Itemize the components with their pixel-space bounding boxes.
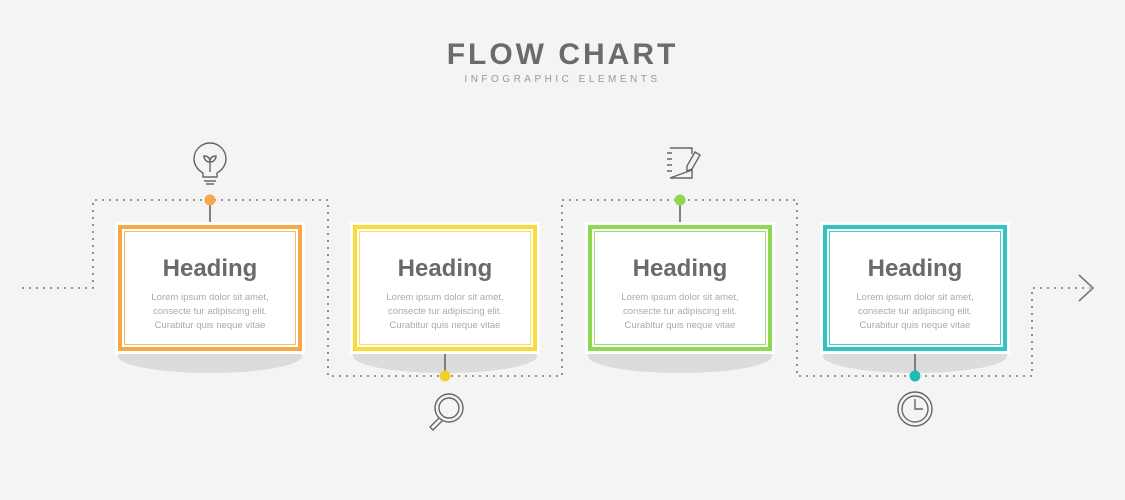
dots [204, 194, 920, 382]
icon: magnifier [430, 394, 463, 430]
panel 1: consecte tur adipiscing elit. [153, 306, 267, 317]
icon: notebook [667, 148, 700, 178]
panel 3: Curabitur quis neque vitae [625, 320, 735, 331]
title: FLOW CHART [447, 38, 678, 71]
arrow head [1079, 275, 1093, 301]
panel 2: consecte tur adipiscing elit. [388, 306, 502, 317]
panel 1: Curabitur quis neque vitae [155, 320, 265, 331]
panel 4 [820, 222, 1010, 354]
shadows [118, 339, 1007, 373]
panel 2: Curabitur quis neque vitae [390, 320, 500, 331]
panel 4: Lorem ipsum dolor sit amet, [856, 292, 974, 303]
panel 3: consecte tur adipiscing elit. [623, 306, 737, 317]
panel 4: Curabitur quis neque vitae [860, 320, 970, 331]
icon: clock [898, 392, 932, 426]
dotted path [22, 200, 1090, 376]
panel 3: Lorem ipsum dolor sit amet, [621, 292, 739, 303]
panel 4: consecte tur adipiscing elit. [858, 306, 972, 317]
connectors [210, 200, 915, 376]
panel 3: Heading [633, 255, 727, 282]
panel 2: Heading [398, 255, 492, 282]
panel 4: Heading [868, 255, 962, 282]
panel 2: Lorem ipsum dolor sit amet, [386, 292, 504, 303]
panel 2 [350, 222, 540, 354]
icon: bulb [194, 143, 226, 184]
panel 1 [115, 222, 305, 354]
panel 3 [585, 222, 775, 354]
subtitle: INFOGRAPHIC ELEMENTS [464, 74, 661, 85]
panel 1: Heading [163, 255, 257, 282]
panel 1: Lorem ipsum dolor sit amet, [151, 292, 269, 303]
